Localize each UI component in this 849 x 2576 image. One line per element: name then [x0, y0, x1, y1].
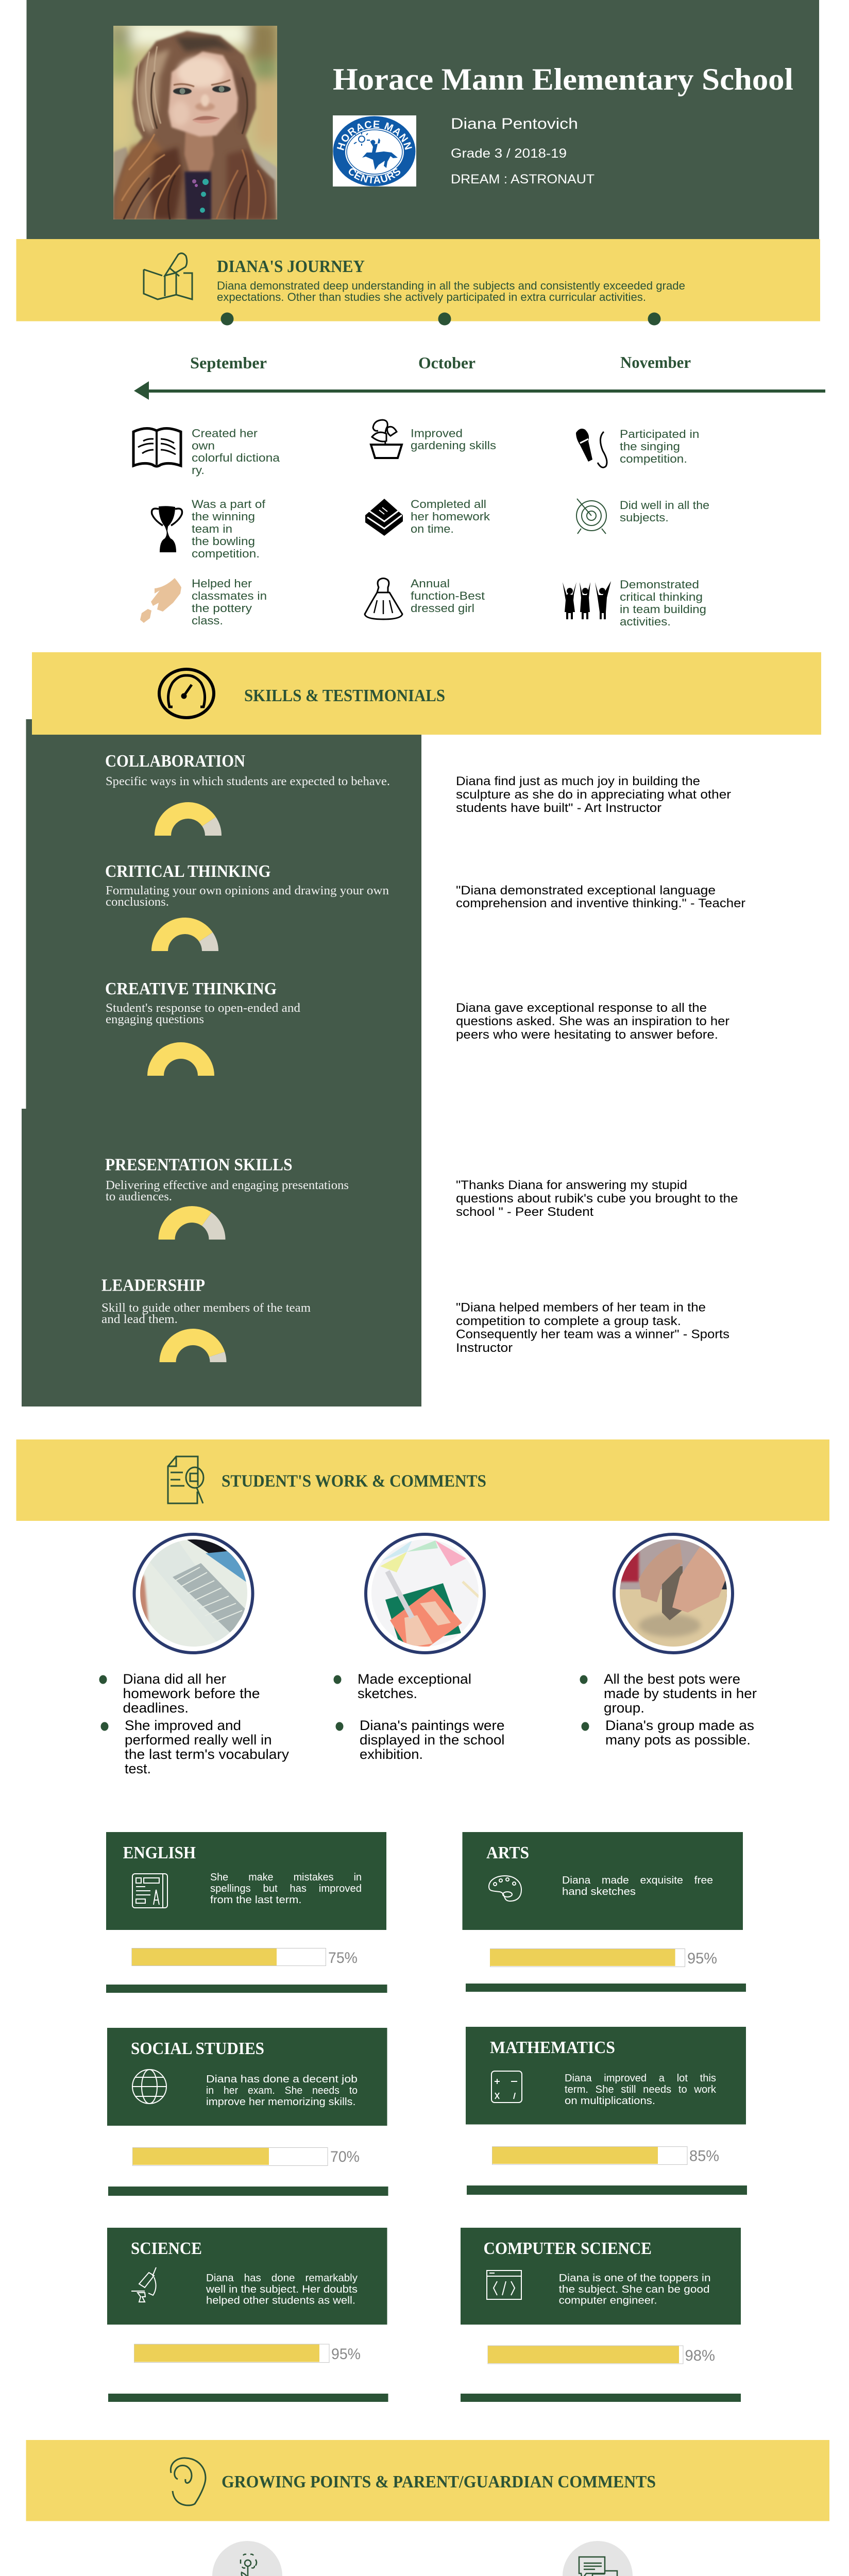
- work comments: homework: performed really well in: [125, 1732, 272, 1748]
- text: subjects: Did well in all the: [620, 499, 709, 512]
- work comments: homework: homework before the: [123, 1686, 260, 1701]
- skills heading: SKILLS & TESTIMONIALS: [244, 686, 445, 705]
- text: team building: in team building: [620, 603, 706, 616]
- work comments: sketches: sketches.: [358, 1686, 417, 1701]
- icon: ear: [171, 2458, 206, 2505]
- work heading: STUDENT'S WORK & COMMENTS: [222, 1471, 486, 1491]
- text: Arts comment: Diana made exquisite free: [562, 1875, 713, 1886]
- icon: document with magnifier: [168, 1456, 203, 1503]
- icon: microphone: [576, 429, 607, 467]
- skill: presentation skills: [105, 1155, 349, 1240]
- banner: Diana's journey: [16, 239, 820, 321]
- icon: target: [576, 499, 606, 534]
- testimonial: sports instructor: competition to complete a group task.: [456, 1314, 681, 1328]
- subject card: Computer Science: COMPUTER SCIENCE: [483, 2239, 652, 2258]
- icon: open book: [133, 428, 181, 466]
- text: gardening: Improved: [411, 427, 463, 440]
- skill: collaboration: Specific ways in which students are expected to behave.: [106, 775, 390, 788]
- progress bar: Social Studies: 70%: [330, 2148, 360, 2165]
- progress bar: Computer Science: 98%: [685, 2347, 715, 2364]
- text: gardening: [411, 427, 496, 452]
- arch gauge: critical thinking: [151, 918, 218, 951]
- progress bar: Mathematics: 85%: [689, 2147, 719, 2165]
- icon: team: [563, 581, 611, 619]
- text: subjects: [620, 499, 709, 524]
- subject card: Mathematics: [466, 2027, 746, 2125]
- school logo: HORACE MANN: [337, 121, 412, 150]
- work comments: homework: Diana did all her: [123, 1671, 226, 1687]
- text: Computer Science comment: computer engineer.: [559, 2295, 657, 2307]
- text: Computer Science comment: Diana is one of the toppers in: [559, 2273, 711, 2284]
- text: team building: [620, 578, 706, 628]
- school logo: CENTAURS: [348, 168, 401, 183]
- text: Social Studies comment: [206, 2074, 358, 2108]
- work comments: homework: deadlines.: [123, 1700, 189, 1716]
- text: pottery: class.: [192, 614, 223, 627]
- work comments: homework: test.: [125, 1761, 151, 1776]
- journey description: Diana demonstrated deep understanding in all the subjects and consistently exceeded grade: [217, 279, 685, 292]
- icon: newspaper: [132, 1874, 167, 1908]
- text: dictionary: [192, 427, 280, 477]
- skill: leadership: and lead them.: [101, 1313, 178, 1326]
- subject card: English: [106, 1832, 386, 1930]
- testimonial: creative thinking: [456, 1001, 729, 1042]
- testimonial: art instructor: [456, 774, 731, 815]
- achievements grid: [133, 420, 709, 628]
- text: Mathematics comment: [565, 2073, 717, 2107]
- subject card: Arts: [463, 1832, 743, 1930]
- skill: presentation skills: to audiences.: [106, 1190, 172, 1204]
- student name: Diana Pentovich: [451, 115, 578, 132]
- work comments: homework: [99, 1671, 290, 1776]
- icon: plant: [371, 420, 402, 458]
- skill: critical thinking: Formulating your own opinions and drawing your own: [106, 884, 389, 897]
- work comments: homework: She improved and: [125, 1718, 241, 1733]
- testimonial: teacher: "Diana demonstrated exceptional language: [456, 884, 716, 897]
- icon: comment bubbles: [563, 2541, 633, 2576]
- progress bar: Arts: [490, 1948, 717, 1967]
- text: bowling: the winning: [192, 510, 255, 523]
- icon: calculator: [491, 2071, 522, 2103]
- testimonial: teacher: comprehension and inventive thinking." - Teacher: [456, 896, 745, 910]
- work comments: sketches: exhibition.: [360, 1747, 423, 1762]
- text: Social Studies comment: Diana has done a decent job: [206, 2074, 358, 2085]
- work comments: pottery: Diana's group made as: [605, 1718, 754, 1733]
- banner: skills and testimonials: [32, 652, 821, 735]
- text: homework: her homework: [411, 510, 490, 523]
- arch gauge: leadership: [160, 1329, 227, 1362]
- text: English comment: spellings but has improved: [210, 1883, 362, 1894]
- work comments: sketches: Made exceptional: [358, 1671, 471, 1687]
- icon: flower pot: [212, 2541, 282, 2576]
- header panel: [27, 0, 819, 239]
- text: homework: [411, 498, 490, 535]
- school logo: [333, 115, 416, 187]
- work comments: sketches: Diana's paintings were: [360, 1718, 505, 1733]
- bar: Science footer: [108, 2394, 388, 2402]
- text: pottery: classmates in: [192, 589, 267, 602]
- bar: English footer: [106, 1985, 387, 1993]
- testimonial: creative thinking: peers who were hesitating to answer before.: [456, 1028, 718, 1042]
- text: dictionary: Created her: [192, 427, 258, 440]
- skill: critical thinking: conclusions.: [106, 895, 169, 909]
- text: dictionary: own: [192, 439, 215, 452]
- icon: stack of books: [365, 499, 403, 536]
- icon: map and pencil: [144, 253, 192, 299]
- skill: presentation skills: PRESENTATION SKILLS: [105, 1155, 293, 1175]
- subject card: Science: SCIENCE: [131, 2239, 202, 2258]
- text: dictionary: ry.: [192, 464, 205, 477]
- icon: microscope: [131, 2267, 156, 2302]
- work comments: pottery: All the best pots were: [604, 1671, 740, 1687]
- text: dressed: Annual: [411, 577, 450, 590]
- subject card: Social Studies: SOCIAL STUDIES: [131, 2039, 264, 2058]
- text: Science comment: helped other students as well.: [206, 2295, 355, 2307]
- skill: leadership: Skill to guide other members of the team: [101, 1301, 311, 1315]
- testimonial: art instructor: Diana find just as much joy in building the: [456, 774, 700, 788]
- text: English comment: [210, 1872, 362, 1906]
- panel: skills: [22, 719, 421, 1406]
- skill: collaboration: COLLABORATION: [105, 752, 245, 771]
- text: Arts comment: hand sketches: [562, 1886, 636, 1897]
- text: pottery: the pottery: [192, 602, 252, 615]
- banner: student's work: [16, 1439, 829, 1521]
- school title: Horace Mann Elementary School: [333, 62, 793, 96]
- text: Computer Science comment: the subject. She can be good: [559, 2284, 710, 2295]
- text: subjects: subjects.: [620, 511, 669, 524]
- text: dressed: dressed girl: [411, 602, 474, 615]
- skill: creative thinking: engaging questions: [106, 1013, 204, 1026]
- text: singing: competition.: [620, 452, 687, 465]
- work comments: pottery: group.: [604, 1700, 644, 1716]
- progress bar: Science: 95%: [331, 2346, 361, 2363]
- timeline: September: [190, 353, 267, 372]
- arch gauge: presentation: [159, 1206, 226, 1240]
- icon: dress: [365, 578, 402, 619]
- text: team building: Demonstrated: [620, 578, 699, 591]
- text: bowling: the bowling: [192, 535, 255, 548]
- text: Social Studies comment: improve her memorizing skills.: [206, 2096, 355, 2108]
- icon: helping hands: [140, 578, 181, 623]
- icon: palette: [489, 1876, 521, 1901]
- testimonial: peer student: "Thanks Diana for answering my stupid: [456, 1178, 687, 1192]
- text: pottery: Helped her: [192, 577, 252, 590]
- subject card: Mathematics: MATHEMATICS: [490, 2038, 615, 2057]
- text: bowling: competition.: [192, 547, 260, 560]
- subject card: Arts: ARTS: [486, 1843, 529, 1862]
- grade: Grade 3 / 2018-19: [451, 146, 567, 161]
- work comments: pottery: many pots as possible.: [605, 1732, 751, 1748]
- text: singing: Participated in: [620, 428, 700, 440]
- testimonial: art instructor: students have built" - Art Instructor: [456, 801, 661, 815]
- progress bar: English: [132, 1948, 358, 1967]
- progress bar: English: 75%: [328, 1950, 358, 1967]
- bar: Social Studies footer: [108, 2187, 388, 2196]
- testimonial: creative thinking: questions asked. She was an inspiration to her: [456, 1014, 729, 1028]
- work comments: pottery: made by students in her: [604, 1686, 757, 1701]
- testimonial: peer student: questions about rubik's cube you brought to the: [456, 1192, 738, 1206]
- arch gauge: collaboration: [155, 802, 222, 836]
- work comments: pottery: [580, 1671, 757, 1748]
- text: singing: [620, 428, 700, 465]
- text: Mathematics comment: on multiplications.: [565, 2095, 655, 2107]
- progress bar: Arts: 95%: [687, 1950, 717, 1967]
- icon: globe: [132, 2070, 166, 2104]
- text: Science comment: well in the subject. Her doubts: [206, 2284, 358, 2295]
- subject card: Science: [107, 2228, 387, 2325]
- text: Science comment: [206, 2273, 358, 2307]
- testimonial: art instructor: sculpture as she do in appreciating what other: [456, 788, 731, 802]
- skill: leadership: [101, 1276, 311, 1362]
- text: gardening: gardening skills: [411, 439, 496, 452]
- skill: creative thinking: Student's response to open-ended and: [106, 1002, 300, 1015]
- testimonial: peer student: [456, 1178, 738, 1219]
- text: singing: the singing: [620, 440, 680, 453]
- work comments: sketches: displayed in the school: [360, 1732, 505, 1748]
- testimonial: teacher: [456, 884, 745, 910]
- text: bowling: [192, 498, 266, 560]
- icon: gauge: [159, 669, 214, 718]
- student photo: [108, 21, 281, 220]
- icon: trophy: [152, 506, 182, 552]
- text: Mathematics comment: term. She still needs to work: [565, 2084, 717, 2095]
- bar: Arts footer: [466, 1984, 746, 1992]
- arrow: [134, 381, 825, 400]
- skill: collaboration: [105, 752, 390, 836]
- skill: critical thinking: CRITICAL THINKING: [105, 862, 271, 881]
- timeline: November: [620, 353, 691, 371]
- timeline: [134, 312, 825, 400]
- skill: leadership: LEADERSHIP: [101, 1276, 205, 1295]
- subject card: English: ENGLISH: [123, 1843, 196, 1862]
- face: [168, 52, 238, 137]
- banner: growing points: [26, 2440, 829, 2521]
- work photo: sketches: [366, 1534, 484, 1653]
- text: homework: Completed all: [411, 498, 486, 511]
- neck: [184, 131, 214, 173]
- skill: critical thinking: [105, 862, 389, 951]
- journey description: [217, 279, 685, 303]
- skill: presentation skills: Delivering effective and engaging presentations: [106, 1179, 349, 1192]
- text: dressed: [411, 577, 485, 615]
- arch gauge: creative thinking: [147, 1042, 214, 1076]
- timeline: October: [418, 353, 476, 372]
- text: Computer Science comment: [559, 2273, 711, 2307]
- journey heading: DIANA'S JOURNEY: [217, 257, 365, 276]
- text: pottery: [192, 577, 267, 627]
- dress: [184, 172, 211, 220]
- text: Mathematics comment: Diana improved a lot this: [565, 2073, 716, 2084]
- work comments: sketches: [334, 1671, 505, 1762]
- journey description: expectations. Other than studies she actively participated in extra curricular activities.: [217, 291, 646, 303]
- subject card: Social Studies: [107, 2028, 387, 2126]
- testimonial: peer student: school " - Peer Student: [456, 1205, 593, 1219]
- work photo: book: [134, 1534, 252, 1653]
- progress bar: Mathematics: [493, 2147, 719, 2165]
- testimonial: sports instructor: "Diana helped members of her team in the: [456, 1301, 706, 1315]
- work photo: pottery: [614, 1534, 733, 1653]
- bar: Computer Science footer: [461, 2394, 741, 2402]
- skill: creative thinking: CREATIVE THINKING: [105, 979, 277, 998]
- work comments: homework: the last term's vocabulary: [125, 1747, 290, 1762]
- bar: Mathematics footer: [467, 2185, 747, 2195]
- text: English comment: from the last term.: [210, 1894, 302, 1906]
- text: homework: on time.: [411, 522, 454, 535]
- growing heading: GROWING POINTS & PARENT/GUARDIAN COMMENTS: [222, 2472, 656, 2492]
- testimonial: sports instructor: Consequently her team was a winner" - Sports: [456, 1327, 729, 1342]
- icon: code window: [487, 2270, 521, 2299]
- text: Science comment: Diana has done remarkably: [206, 2273, 358, 2284]
- text: Social Studies comment: in her exam. She needs to: [206, 2085, 358, 2096]
- progress bar: Computer Science: [488, 2346, 715, 2364]
- text: Arts comment: [562, 1875, 713, 1897]
- text: bowling: Was a part of: [192, 498, 266, 511]
- text: team building: activities.: [620, 615, 671, 628]
- testimonial: sports instructor: Instructor: [456, 1341, 513, 1355]
- progress bar: Social Studies: [133, 2147, 360, 2166]
- text: English comment: She make mistakes in: [210, 1872, 362, 1883]
- text: team building: critical thinking: [620, 590, 703, 603]
- text: dictionary: colorful dictiona: [192, 451, 280, 464]
- dream: DREAM : ASTRONAUT: [451, 172, 595, 187]
- progress bar: Science: [134, 2344, 361, 2363]
- testimonial: creative thinking: Diana gave exceptional response to all the: [456, 1001, 707, 1015]
- subject card: Computer Science: [461, 2228, 741, 2325]
- text: bowling: team in: [192, 522, 232, 535]
- text: dressed: function-Best: [411, 589, 485, 602]
- testimonial: sports instructor: [456, 1301, 729, 1355]
- skill: creative thinking: [105, 979, 300, 1076]
